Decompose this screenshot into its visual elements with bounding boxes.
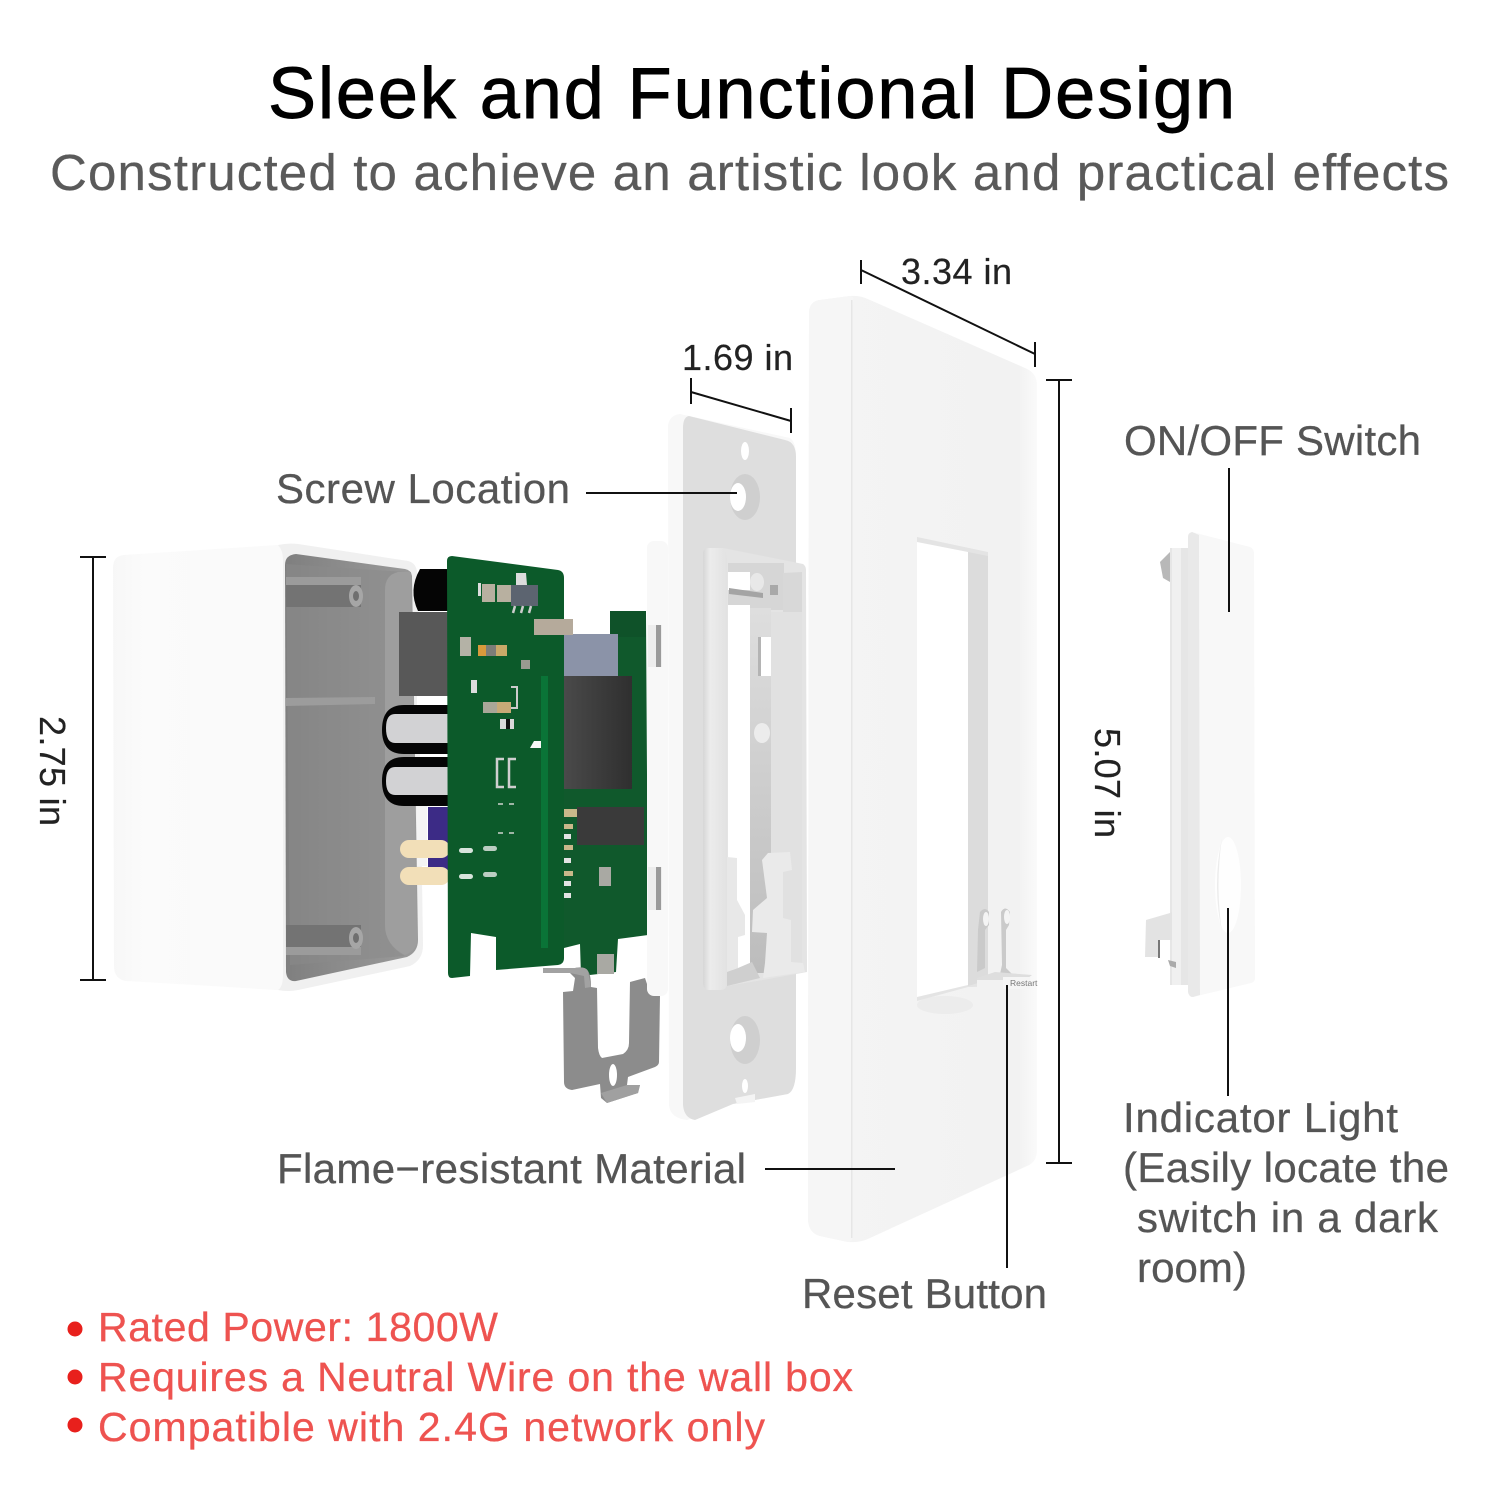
specification bullet list xyxy=(68,1304,854,1450)
dimension: 3.34 in: 3.34 in xyxy=(901,251,1012,292)
mounting strap rear tabs xyxy=(647,541,668,996)
dimension: 2.75 in xyxy=(32,557,106,980)
dimension: 5.07 in: 5.07 in xyxy=(1087,728,1128,838)
title: Sleek and Functional Design xyxy=(268,54,1235,134)
callout: flame-resistant material: Flame−resistant Material xyxy=(277,1145,746,1192)
dimension: 1.69 in: 1.69 in xyxy=(682,337,793,378)
subtitle: Constructed to achieve an artistic look and practical effects xyxy=(50,144,1449,201)
dimension: 2.75 in: 2.75 in xyxy=(32,716,73,826)
mounting plate xyxy=(668,414,796,1120)
dimension: 5.07 in xyxy=(1046,380,1128,1163)
specification bullet list: Requires a Neutral Wire on the wall box xyxy=(98,1354,854,1400)
callout: on/off switch: ON/OFF Switch xyxy=(1124,417,1421,464)
secondary circuit board xyxy=(563,611,648,976)
wall cover plate xyxy=(808,296,1037,1242)
callout: indicator light: switch in a dark xyxy=(1137,1194,1439,1241)
callout: indicator light xyxy=(1123,908,1449,1291)
callout: indicator light: (Easily locate the xyxy=(1123,1144,1449,1191)
switch frame on mounting plate xyxy=(703,548,807,990)
metal bracket xyxy=(543,967,660,1103)
reset button assembly: Restart xyxy=(1010,978,1038,988)
back box housing xyxy=(113,544,423,991)
callout: reset button: Reset Button xyxy=(802,1270,1047,1317)
specification bullet list: Compatible with 2.4G network only xyxy=(98,1404,766,1450)
reset button assembly xyxy=(977,908,1038,996)
specification bullet list: Rated Power: 1800W xyxy=(98,1304,498,1350)
callout: indicator light: room) xyxy=(1137,1244,1247,1291)
dimension: 3.34 in xyxy=(861,251,1035,367)
callout: indicator light: Indicator Light xyxy=(1123,1094,1398,1141)
callout: screw location: Screw Location xyxy=(276,465,570,512)
dimension: 1.69 in xyxy=(682,337,793,433)
on/off switch paddle xyxy=(1145,532,1255,997)
internal components behind circuit board xyxy=(382,569,450,885)
main circuit board xyxy=(447,556,573,978)
